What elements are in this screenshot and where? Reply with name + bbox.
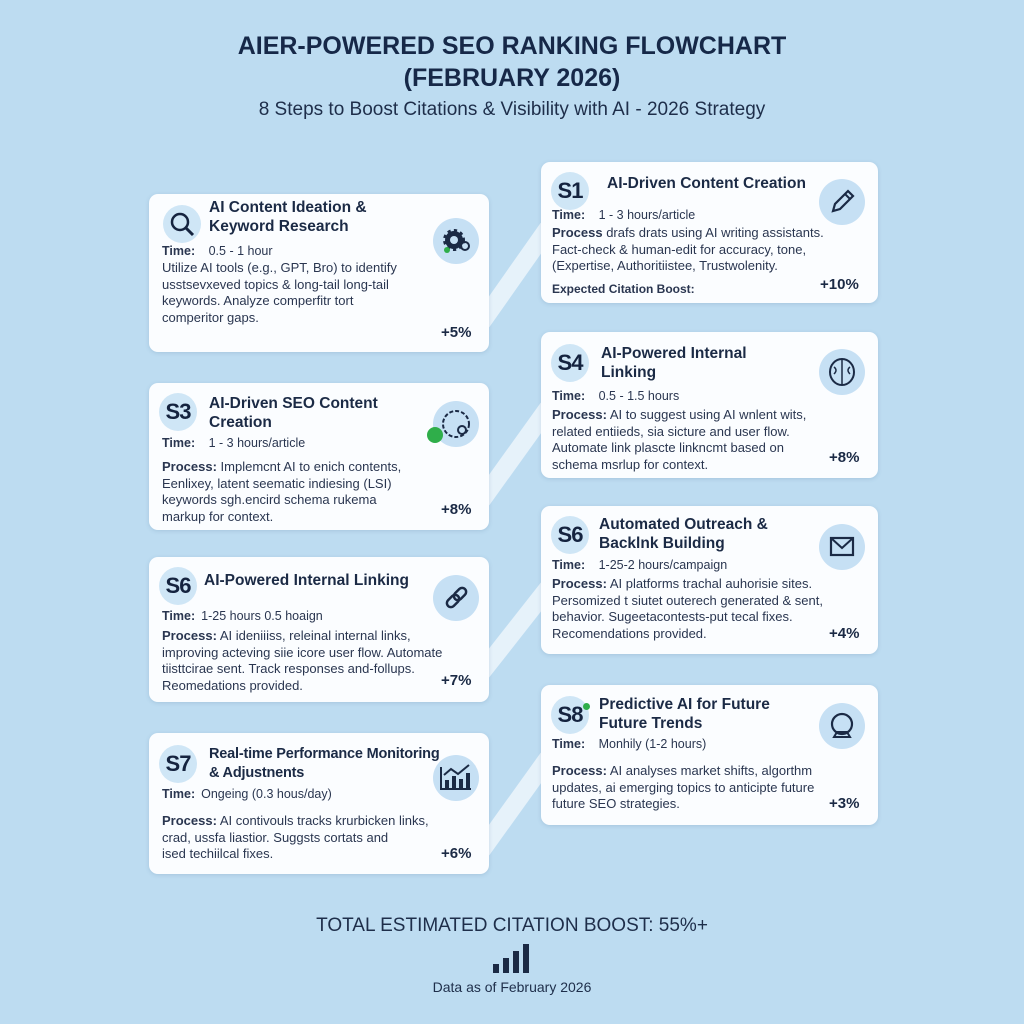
panel: S6 internal linking: AI-Powered Internal Linking bbox=[204, 572, 409, 589]
panel: S4: Linking bbox=[601, 364, 656, 381]
panel: S4: related entiieds, sia sicture and user flow. bbox=[552, 424, 790, 438]
panel: S6 outreach: Persomized t siutet outerech generated & sent, bbox=[552, 592, 823, 608]
panel: S3: +8% bbox=[441, 501, 471, 518]
panel: S7: ised techiilcal fixes. bbox=[162, 846, 273, 861]
panel: S4: Time: 0.5 - 1.5 hours bbox=[552, 389, 679, 403]
panel: S1: AI-Driven Content Creation bbox=[607, 175, 806, 192]
title bbox=[238, 32, 786, 92]
panel: S4: AI-Powered Internal bbox=[601, 345, 747, 362]
panel: S6 outreach: S6 bbox=[558, 522, 582, 547]
panel: S6 outreach: behavior. Sugeetacontests-put tecal fixes. bbox=[552, 609, 793, 624]
icon: gear bbox=[433, 218, 479, 264]
panel: S1: +10% bbox=[820, 276, 859, 293]
panel: S1: Fact-check & human-edit for accuracy, tone, bbox=[552, 242, 806, 256]
panel: S1: (Expertise, Authoritiistee, Trustwolenity. bbox=[552, 258, 778, 273]
panel: S6 internal linking: Time: 1-25 hours 0.5 hoaign bbox=[162, 609, 323, 623]
panel: S4: +8% bbox=[829, 449, 859, 466]
panel: S3: markup for context. bbox=[162, 508, 273, 524]
panel: keyword research: Time: 0.5 - 1 hour bbox=[162, 244, 273, 258]
title: AIER-POWERED SEO RANKING FLOWCHART bbox=[238, 32, 786, 60]
panel: S6 internal linking bbox=[149, 557, 489, 702]
panel: S1: Expected Citation Boost: bbox=[552, 282, 695, 296]
icon: link bbox=[433, 575, 479, 621]
panel: S1: Process drafs drats using AI writing assistants. bbox=[552, 225, 824, 240]
panel: S6 outreach: Process: AI platforms trachal auhorisie sites. bbox=[552, 576, 812, 591]
panel: S6 internal linking: tiisttcirae sent. Track responses and-follups. bbox=[162, 661, 415, 676]
heading bbox=[209, 199, 367, 235]
panel: S8: S8 bbox=[558, 702, 582, 727]
panel: S4: Process: AI to suggest using AI wnlent wits, bbox=[552, 407, 806, 422]
icon: magnifier bbox=[163, 205, 201, 243]
panel: S1 bbox=[541, 162, 878, 303]
panel: S6 outreach: Backlnk Building bbox=[599, 535, 725, 552]
panel: S4: Automate link plascte linkncmt based on bbox=[552, 440, 784, 455]
panel: S8: updates, ai emerging topics to anticipte future bbox=[552, 780, 814, 794]
panel: S4: S4 bbox=[558, 350, 582, 375]
title: (FEBRUARY 2026) bbox=[404, 64, 620, 92]
panel: S7: crad, ussfa liastior. Suggsts cortats and bbox=[162, 830, 388, 844]
panel: S3: Time: 1 - 3 hours/article bbox=[162, 436, 305, 450]
panel: S3 bbox=[149, 383, 489, 530]
panel: S8: Future Trends bbox=[599, 715, 702, 732]
panel: S6 outreach: Recomendations provided. bbox=[552, 626, 707, 640]
icon: envelope bbox=[819, 524, 865, 570]
panel: S3: AI-Driven SEO Content bbox=[209, 395, 378, 412]
icon: pencil bbox=[819, 179, 865, 225]
panel: S8: +3% bbox=[829, 795, 859, 812]
panel: keyword research: Utilize AI tools (e.g., GPT, Bro) to identify bbox=[162, 260, 397, 275]
panel: S4: schema msrlup for context. bbox=[552, 456, 708, 472]
panel: keyword research: keywords. Analyze comperfitr tort bbox=[162, 293, 353, 308]
icon: chart bbox=[433, 755, 479, 801]
panel: S3: Process: Implemcnt AI to enich contents, bbox=[162, 459, 401, 474]
heading: AI Content Ideation & bbox=[209, 199, 367, 216]
panel: S7: Real-time Performance Monitoring bbox=[209, 746, 439, 762]
panel: S3: Eenlixey, latent seematic indiesing (LSI) bbox=[162, 476, 392, 490]
panel: S6 internal linking: Process: AI ideniiiss, releinal internal links, bbox=[162, 628, 411, 643]
icon: globe bbox=[433, 401, 479, 447]
panel: keyword research bbox=[149, 194, 489, 352]
panel: S7: Process: AI contivouls tracks krurbicken links, bbox=[162, 813, 429, 828]
panel: S8 bbox=[541, 685, 878, 825]
panel: S6 internal linking: Reomedations provided. bbox=[162, 678, 303, 692]
panel: S6 internal linking: +7% bbox=[441, 672, 471, 689]
panel: S6 internal linking: S6 bbox=[166, 573, 190, 598]
panel: S1: Time: 1 - 3 hours/article bbox=[552, 208, 695, 222]
panel: S4 bbox=[541, 332, 878, 478]
icon: brain bbox=[819, 349, 865, 395]
panel: keyword research: comperitor gaps. bbox=[162, 310, 259, 324]
panel: keyword research: +5% bbox=[441, 324, 471, 341]
panel: S7: & Adjustnents bbox=[209, 765, 304, 781]
panel: S3: keywords sgh.encird schema rukema bbox=[162, 492, 377, 507]
panel: S7: +6% bbox=[441, 845, 471, 862]
panel: S7: Time: Ongeing (0.3 hous/day) bbox=[162, 787, 332, 801]
total boost: TOTAL ESTIMATED CITATION BOOST: 55%+ bbox=[316, 915, 708, 936]
panel: S6 internal linking: improving acteving siie icore user flow. Automate bbox=[162, 644, 442, 660]
panel: keyword research: usstsevxeved topics & long-tail long-tail bbox=[162, 276, 389, 292]
panel: S3: Creation bbox=[209, 414, 272, 431]
panel: S3: S3 bbox=[166, 399, 190, 424]
panel: S8: Predictive AI for Future bbox=[599, 696, 770, 713]
panel: S8: Time: Monhily (1-2 hours) bbox=[552, 737, 706, 751]
panel: S6 outreach: Automated Outreach & bbox=[599, 516, 768, 533]
panel: S7 bbox=[149, 733, 489, 874]
footnote: Data as of February 2026 bbox=[433, 979, 591, 995]
icon: crystal ball bbox=[819, 703, 865, 749]
subtitle: 8 Steps to Boost Citations & Visibility with AI - 2026 Strategy bbox=[259, 99, 765, 120]
panel: S1: S1 bbox=[558, 178, 582, 203]
panel: S6 outreach bbox=[541, 506, 878, 654]
icon: bar chart bbox=[493, 944, 529, 973]
panel: S8: future SEO strategies. bbox=[552, 796, 680, 811]
heading: Keyword Research bbox=[209, 218, 349, 235]
panel: S6 outreach: Time: 1-25-2 hours/campaign bbox=[552, 558, 727, 572]
panel: S6 outreach: +4% bbox=[829, 625, 859, 642]
panel: S8: Process: AI analyses market shifts, algorthm bbox=[552, 763, 812, 778]
panel: S7: S7 bbox=[166, 751, 190, 776]
